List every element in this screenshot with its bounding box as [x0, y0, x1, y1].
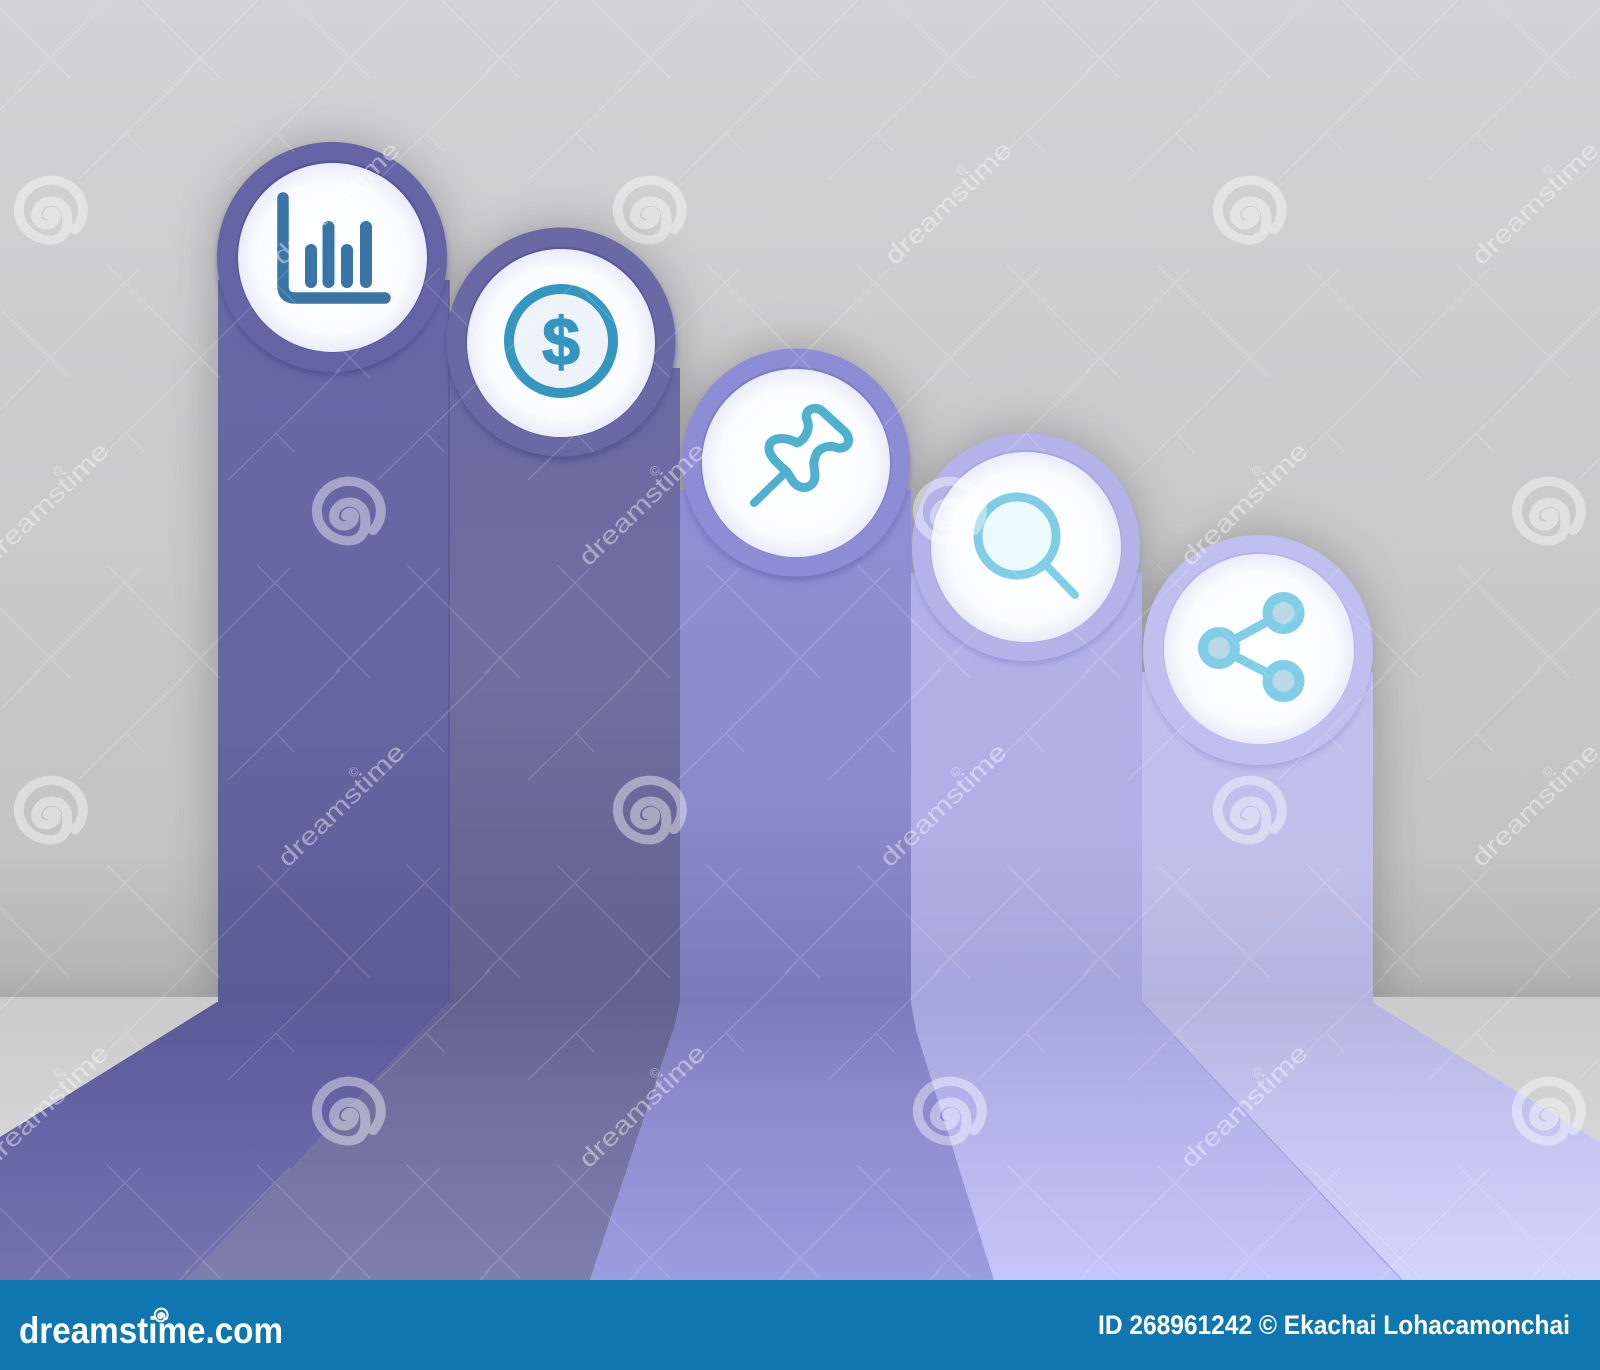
icon: dollar coin	[509, 289, 613, 393]
watermark text: dreamstime	[874, 738, 1013, 873]
watermark text: ©	[952, 161, 970, 179]
icon: bar chart	[283, 198, 385, 298]
watermark text: dreamstime	[272, 738, 411, 873]
wall shadow behind bars	[212, 139, 1378, 1013]
watermark swirls	[19, 180, 1581, 1141]
footer logo text: dreamstime.com	[19, 1310, 283, 1351]
watermark text: ©	[947, 763, 965, 781]
watermark text: ©	[340, 161, 358, 179]
watermark text: ©	[1539, 763, 1557, 781]
badge 1: bar chart icon	[217, 142, 447, 376]
watermark text: dreamstime	[1175, 1039, 1314, 1174]
badge 2: dollar icon	[446, 228, 676, 461]
wall background	[0, 0, 1600, 997]
watermark text: ©	[646, 1064, 664, 1082]
watermark text: ©	[345, 763, 363, 781]
icon: push pin	[754, 408, 849, 503]
watermark text: dreamstime	[1466, 738, 1600, 873]
badge 4: magnifier icon	[912, 433, 1140, 665]
watermark text: ©	[1539, 161, 1557, 179]
icon: share	[1203, 597, 1300, 697]
watermark text: ©	[49, 462, 67, 480]
watermark text: dreamstime	[1466, 136, 1600, 271]
watermark text	[0, 136, 1600, 1174]
watermark text: dreamstime	[573, 437, 712, 572]
watermark text: ©	[646, 462, 664, 480]
badge 5: share icon	[1143, 535, 1373, 769]
watermark text: dreamstime	[1175, 437, 1314, 572]
panel: bar 3	[590, 490, 994, 1280]
icon: magnifier	[978, 497, 1075, 595]
panel: bar 5	[1142, 672, 1600, 1280]
panel: bar 1	[0, 280, 449, 1280]
panel: bar 4	[911, 573, 1402, 1280]
panel: bar 2	[186, 280, 680, 1280]
watermark text: dreamstime	[573, 1039, 712, 1174]
watermark text: ©	[49, 1064, 67, 1082]
watermark text: dreamstime	[267, 136, 406, 271]
footer band	[0, 1280, 1600, 1370]
watermark text: dreamstime	[879, 136, 1018, 271]
icon: dollar coin: $	[542, 304, 580, 380]
watermark text: ©	[1248, 1064, 1266, 1082]
floor background	[0, 997, 1600, 1280]
watermark text: ©	[1248, 462, 1266, 480]
badge 3: pin icon	[682, 348, 910, 581]
